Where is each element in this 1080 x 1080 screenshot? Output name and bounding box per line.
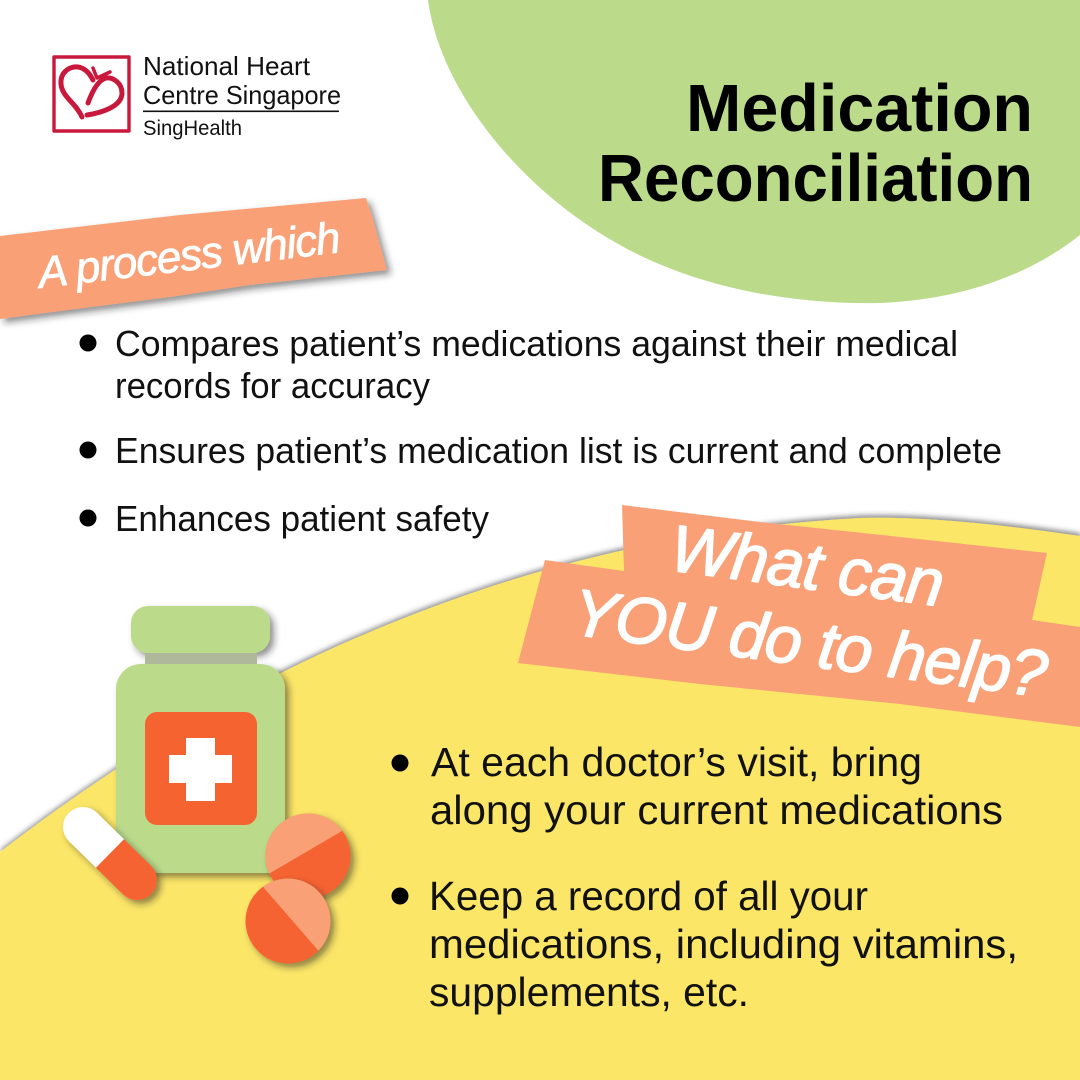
logo icon: heart in square: [54, 57, 129, 131]
action 2: [392, 873, 1018, 1015]
action 1: along your current medications: [430, 787, 1003, 833]
action 2: supplements, etc.: [429, 969, 749, 1015]
action 2: medications, including vitamins,: [429, 921, 1018, 967]
title: Reconciliation: [598, 141, 1033, 216]
bullet 1: Compares patient’s medications against their medical: [115, 323, 958, 364]
bottle label: [145, 712, 257, 825]
bottle neck: [145, 653, 257, 664]
capsule: [63, 807, 157, 900]
logo parent: SingHealth: [143, 117, 242, 140]
bullet 3: Enhances patient safety: [115, 498, 489, 539]
bottle body: [116, 664, 285, 873]
bottle cap: [131, 606, 270, 653]
action 1: [392, 739, 1003, 833]
tablet lower: [244, 878, 340, 972]
tablet upper: [265, 812, 360, 904]
logo: National Heart Centre Singapore: Centre Singapore: [143, 80, 341, 110]
bullet 2: Ensures patient’s medication list is current and complete: [115, 430, 1002, 471]
title: Medication: [686, 71, 1033, 146]
banner: What can YOU do to help?: [518, 505, 1080, 727]
action 2: Keep a record of all your: [429, 873, 868, 919]
green title blob: [428, 0, 1080, 303]
bullet 1: records for accuracy: [115, 365, 430, 406]
logo: National Heart Centre Singapore: [54, 51, 341, 140]
action bullet list: [392, 739, 1018, 1015]
banner text: What can: [666, 511, 949, 620]
bullet 1: [80, 323, 958, 406]
banner: A process which: [0, 198, 387, 319]
action 1: At each doctor’s visit, bring: [431, 739, 922, 785]
yellow lower panel: [0, 518, 1080, 1080]
title: [598, 71, 1033, 216]
cross: [169, 738, 232, 801]
icon: medicine bottle and pills: [63, 606, 359, 971]
banner: What can YOU do to help?: YOU do to help?: [568, 575, 1052, 711]
process bullet list: [80, 323, 1002, 539]
logo name: National Heart: [143, 51, 311, 81]
banner text: A process which: [32, 213, 343, 298]
